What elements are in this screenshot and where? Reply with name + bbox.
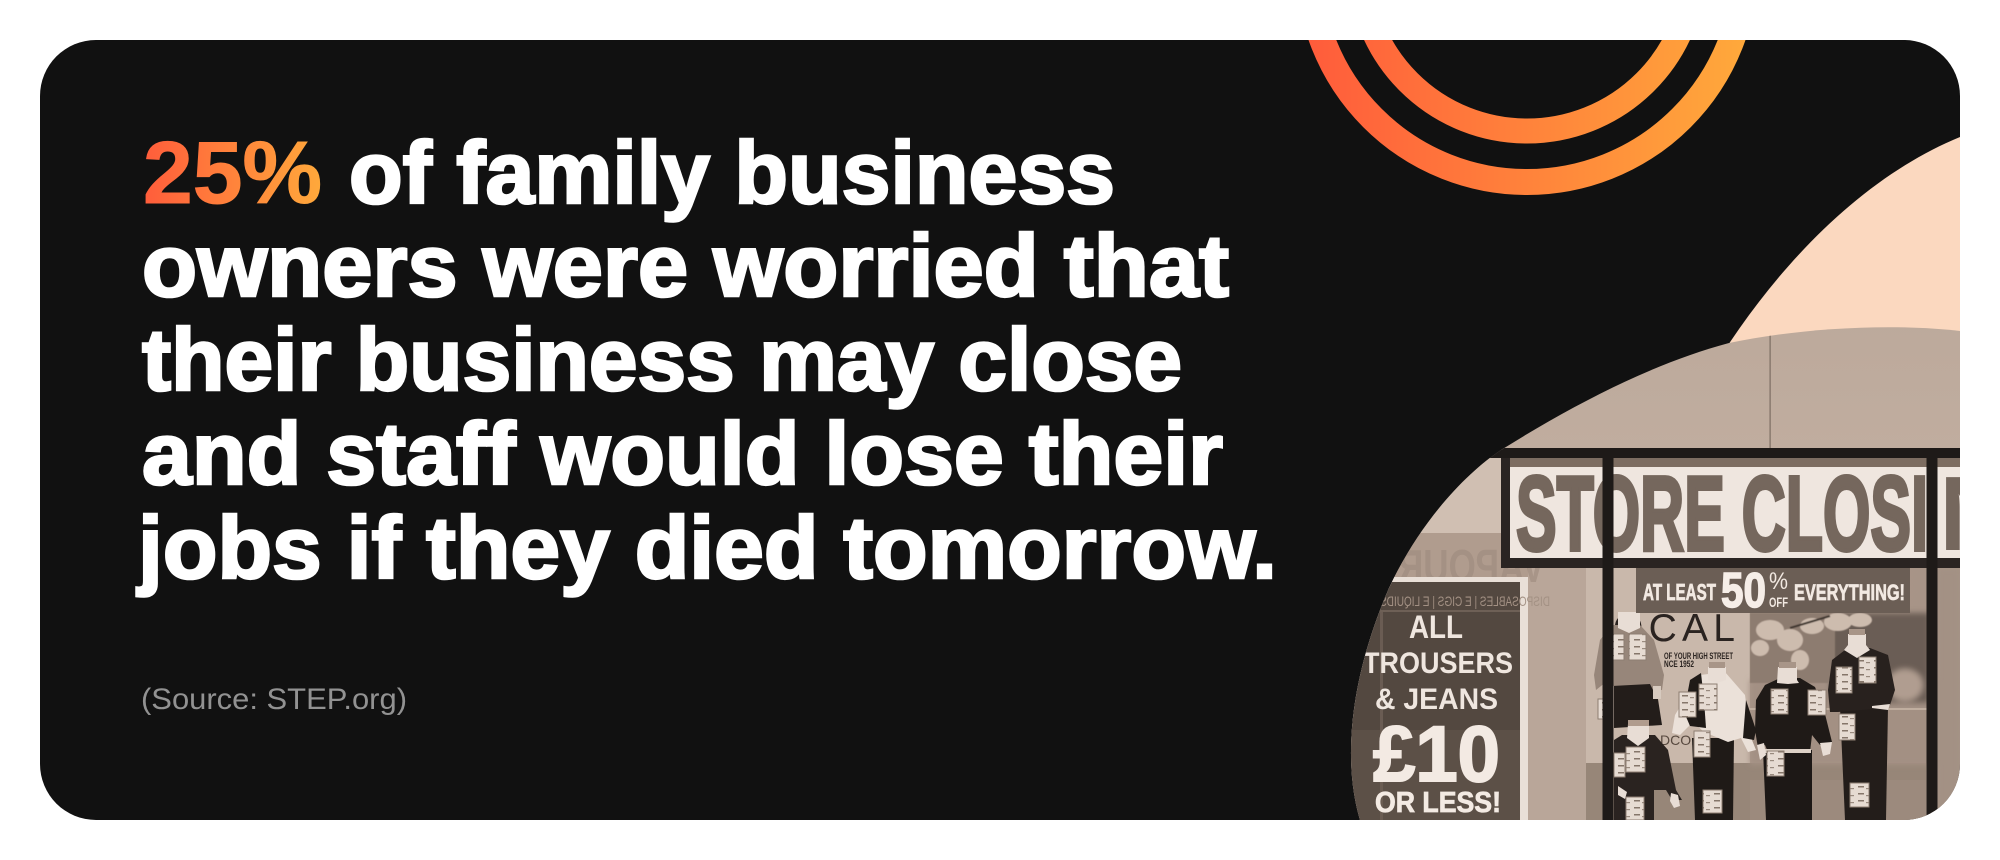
poster: trousers and jeans offer: £10 xyxy=(1373,709,1500,798)
sale banner: at least 50% off: AT LEAST xyxy=(1643,579,1716,605)
line four: and staff would lose their xyxy=(142,404,1223,503)
poster: trousers and jeans offer: DISPOSABLES | E CIGS | E LIQUIDS xyxy=(1380,593,1550,609)
sale banner: at least 50% off xyxy=(1636,568,1910,613)
shop brand poster xyxy=(1613,607,1735,748)
line three: their business may close xyxy=(142,310,1182,409)
shop fascia xyxy=(1501,327,1960,450)
highlighted number: 25% xyxy=(143,123,322,222)
shop brand poster: OCAL xyxy=(1613,607,1735,650)
window frame xyxy=(1490,448,1960,820)
mannequin: dark jumper with white belt xyxy=(1755,662,1832,820)
mannequin: child in dark jumper xyxy=(1614,720,1682,820)
decorative concentric orange arcs xyxy=(1308,40,1746,195)
sale banner: at least 50% off: OFF xyxy=(1769,594,1788,610)
poster: trousers and jeans offer: TROUSERS xyxy=(1363,647,1513,680)
headline: 25% statistic xyxy=(136,123,1277,597)
peach blob xyxy=(1730,137,1960,343)
poster: trousers and jeans offer: & JEANS xyxy=(1375,683,1498,716)
line one: of family business xyxy=(349,123,1115,222)
sale banner: at least 50% off: % xyxy=(1769,568,1788,595)
line two: owners were worried that xyxy=(142,216,1229,315)
photo: closing-down shop window xyxy=(1350,327,1960,820)
mannequin: grey sweater and skirt xyxy=(1594,612,1664,728)
line five: jobs if they died tomorrow. xyxy=(136,498,1277,597)
flowers xyxy=(1750,613,1872,683)
price tags xyxy=(1598,634,1876,820)
mannequin: tall dark jumper and trousers xyxy=(1828,629,1895,820)
poster: trousers and jeans offer xyxy=(1345,577,1550,820)
poster: trousers and jeans offer: OR LESS! xyxy=(1375,787,1501,819)
source note: (Source: STEP.org) xyxy=(141,683,407,716)
reflected poster lettering: VAPOUR xyxy=(1398,540,1545,592)
shop brand poster: OF YOUR HIGH STREET xyxy=(1664,651,1733,661)
mannequin: white shirt and dark trousers xyxy=(1672,662,1756,820)
sale banner: at least 50% off: EVERYTHING! xyxy=(1794,580,1905,605)
shop brand poster: DCO.C xyxy=(1660,732,1705,748)
sale banner: at least 50% off: 50 xyxy=(1721,564,1766,618)
poster: trousers and jeans offer: ALL xyxy=(1409,609,1463,645)
shop brand poster: NCE 1952 xyxy=(1664,659,1694,669)
window interior xyxy=(1340,448,1960,820)
